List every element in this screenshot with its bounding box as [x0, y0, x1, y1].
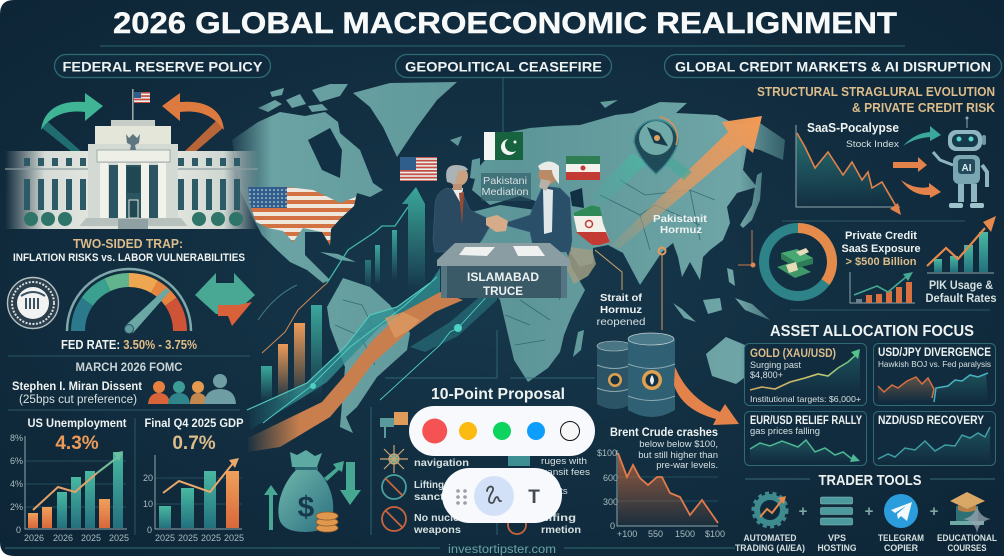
chart: us unemployment: 6% — [10, 456, 23, 466]
dissent text: (25bps cut preference) — [19, 394, 137, 406]
pik label — [926, 280, 996, 305]
brent heading: Brent Crude crashes — [610, 427, 718, 439]
private credit label: SaaS Exposure — [842, 243, 920, 255]
chart: us unemployment: 2025 — [81, 533, 101, 543]
panel: asset allocation — [744, 323, 996, 466]
flag: usa — [400, 157, 437, 181]
panel: trader tools — [735, 472, 997, 553]
proposal: no nuclear weapons — [413, 512, 469, 536]
heading pill: geopolitical ceasefire — [396, 54, 612, 78]
icon: navigation compass — [380, 445, 408, 473]
green curved arrow — [41, 93, 103, 152]
tool labels: TELEGRAM — [878, 533, 924, 543]
proposal: lifting sanctions — [414, 479, 445, 503]
chart: exposure bars — [850, 272, 915, 303]
card: gold: Surging past — [750, 360, 801, 370]
icon: money bag — [264, 450, 361, 532]
private credit label: > $500 Billion — [846, 256, 917, 268]
connector: credit — [738, 230, 752, 265]
plus: + — [865, 503, 874, 520]
credit subheading: STRUCTURAL STRAGLURAL EVOLUTION — [757, 85, 995, 99]
flag on federal reserve — [132, 89, 150, 121]
proposal: lifting sanctions: sanct — [414, 491, 445, 503]
chart: brent price: 550 — [648, 529, 663, 539]
pik label: Default Rates — [926, 293, 996, 305]
card: nzd/usd: NZD/USD RECOVERY — [878, 415, 984, 427]
rising bars on map — [258, 187, 425, 402]
proposal: lifting motion: rmetion — [541, 524, 581, 536]
tool labels: AUTOMATED — [744, 533, 797, 543]
map: north america — [232, 112, 383, 283]
big orange arrow to credit panel — [610, 116, 762, 248]
dissent text — [12, 379, 142, 406]
label: strait of hormuz: reopened — [596, 316, 646, 328]
chart: pik usage — [927, 216, 996, 273]
tool labels: TRADING (AI/EA) — [735, 543, 805, 553]
icon: automated trading gear — [753, 493, 787, 527]
chart: us unemployment: 0 — [16, 525, 21, 535]
location pin — [590, 117, 692, 206]
proposal: transit fees: ruges with — [541, 456, 587, 467]
chart: brent price: $100 — [705, 529, 725, 539]
card: usd/jpy — [874, 344, 996, 406]
chart: q4 gdp: 10 — [143, 499, 153, 509]
credit subheading — [757, 85, 995, 115]
tool labels — [735, 533, 997, 553]
card: eur/usd: EUR/USD RELIEF RALLY — [750, 415, 862, 427]
trees — [24, 212, 243, 226]
heading pill: federal reserve policy: FEDERAL RESERVE POLICY — [62, 58, 263, 74]
negotiating table — [437, 243, 570, 298]
value: gdp: 0.7% — [172, 433, 216, 454]
proposal: navigation: navigation — [414, 457, 469, 469]
handshake — [486, 215, 508, 232]
card: gold: GOLD (XAU/USD) — [750, 348, 836, 360]
label: pakistanit hormuz: Hormuz — [660, 224, 702, 236]
label: pakistanit hormuz — [653, 213, 708, 236]
dissent text: Stephen I. Miran Dissent — [12, 379, 142, 393]
icon: two-way arrows — [195, 273, 255, 326]
table label: ISLAMABAD — [467, 272, 539, 284]
chart: q4 gdp: 0 — [147, 525, 152, 535]
heading: gdp: Final Q4 2025 GDP — [144, 418, 244, 430]
credit subheading: & PRIVATE CREDIT RISK — [852, 101, 995, 115]
ribbons rising across map — [247, 268, 497, 452]
chart: us unemployment: 2026 — [24, 533, 44, 543]
brent note — [638, 439, 718, 471]
panel: global credit — [738, 85, 996, 310]
table label — [467, 272, 539, 298]
proposal: transit fees — [541, 456, 590, 478]
icon: no nuclear — [382, 507, 406, 531]
tool labels: COURSES — [948, 543, 986, 553]
orange down arrow — [674, 367, 739, 425]
proposal list — [380, 412, 590, 536]
chart: us unemployment — [10, 418, 129, 543]
map: arctic islands — [258, 84, 348, 112]
saas heading: SaaS-Pocalypse — [807, 121, 899, 135]
chart: q4 gdp: 2025 — [224, 533, 244, 543]
chart: q4 gdp: 2025 — [178, 533, 198, 543]
icon: fomc members — [148, 374, 236, 404]
toolbar: drawing tools: T — [528, 487, 540, 508]
chart: q4 gdp: 2025 — [155, 533, 175, 543]
card: nzd/usd — [874, 412, 996, 466]
label: pakistani mediation — [481, 173, 531, 201]
map: africa — [466, 205, 585, 382]
icon: money bag: $ — [298, 491, 315, 524]
map: cuba and caribbean — [320, 252, 356, 262]
ribbon: lower teal band — [410, 298, 497, 352]
table label: TRUCE — [483, 286, 523, 298]
orange curved arrow — [162, 93, 224, 152]
map: australia — [706, 337, 745, 384]
icon: flags — [380, 412, 408, 438]
private credit label — [842, 230, 920, 268]
map: eurasia — [472, 102, 785, 285]
coins — [316, 512, 338, 532]
card: gold — [744, 344, 866, 406]
up-right arrow — [324, 461, 344, 481]
world map — [232, 82, 785, 433]
card: eur/usd — [744, 412, 866, 466]
gauge: fed rate — [67, 269, 191, 334]
proposal: lifting motion: ets — [555, 486, 568, 497]
heading: 10-point proposal: 10-Point Proposal — [431, 386, 565, 403]
label: strait of hormuz: Hormuz — [600, 304, 642, 316]
chart: saas-pocalypse — [796, 121, 901, 215]
chart: brent price: +100 — [617, 529, 637, 539]
icon: education cap — [950, 492, 985, 525]
chart: q4 gdp: 2025 — [201, 533, 221, 543]
chart: brent price: 600 — [603, 473, 618, 483]
private credit label: Private Credit — [845, 230, 917, 242]
panel: brent crude — [597, 427, 725, 539]
plus: + — [930, 503, 939, 520]
label: strait of hormuz: Strait of — [600, 292, 643, 304]
proposal: transit fees: transit fees — [541, 467, 590, 478]
title: 2026 GLOBAL MACROECONOMIC REALIGNMENT — [113, 7, 897, 40]
down arrow — [340, 462, 361, 505]
chart: us unemployment: 8% — [10, 433, 23, 443]
trader tools heading: TRADER TOOLS — [818, 472, 922, 489]
arrows to robot — [893, 126, 941, 198]
march fomc heading: MARCH 2026 FOMC — [76, 360, 183, 374]
ribbon: orange band — [248, 292, 463, 452]
label: pakistani mediation: Mediation — [482, 186, 529, 198]
proposal: lifting motion: lifing — [545, 512, 576, 524]
iran map flag — [573, 205, 610, 245]
divider lines — [782, 221, 990, 310]
chart: brent price: 0 — [610, 521, 615, 531]
asset allocation heading: ASSET ALLOCATION FOCUS — [770, 323, 974, 340]
icon: oil barrels — [597, 333, 675, 417]
card: gold: Institutional targets: $6,000+ — [750, 394, 861, 404]
icon: no sanctions — [382, 475, 406, 499]
icon: ai robot — [933, 116, 987, 208]
chart: brent price — [597, 448, 725, 539]
map: tan arabia — [566, 247, 596, 284]
card: eur/usd: gas prices falling — [750, 426, 820, 436]
fed rate label: FED RATE: 3.50% - 3.75% — [61, 337, 197, 352]
value: unemployment: 4.3% — [55, 433, 99, 454]
stock index label: Stock Index — [846, 139, 899, 150]
tool labels: COPIER — [884, 543, 918, 553]
icon: motion badge — [508, 516, 526, 534]
chart: credit donut — [750, 228, 832, 296]
federal reserve building — [5, 120, 258, 229]
toolbar: drawing tools — [442, 468, 562, 523]
plus: + — [799, 503, 808, 520]
right negotiator — [505, 162, 572, 252]
map: madagascar — [573, 330, 584, 357]
proposal: no nuclear weapons: weapons — [413, 524, 461, 536]
brent note: below below $100, — [639, 439, 718, 450]
heading pill: federal reserve policy — [54, 54, 270, 78]
icon: federal reserve seal — [8, 278, 58, 328]
chart: brent price: 1500 — [675, 529, 695, 539]
chart: q4 gdp — [143, 418, 244, 543]
icon: transit fees — [508, 456, 530, 466]
heading pill: global credit markets: GLOBAL CREDIT MARKETS & AI DISRUPTION — [675, 58, 991, 74]
chart: us unemployment: 2026 — [53, 533, 73, 543]
map: south america — [327, 278, 410, 433]
ribbon: teal band — [247, 268, 440, 430]
tool labels: VPS — [828, 533, 846, 543]
two-sided trap heading: TWO-SIDED TRAP: — [73, 237, 183, 251]
proposal: lifting sanctions: Lifting — [414, 479, 444, 491]
chart: brent price: 300 — [603, 497, 618, 507]
map: greenland — [353, 82, 457, 157]
label: pakistani mediation: Pakistani — [483, 175, 527, 187]
icon: vps servers — [820, 497, 852, 525]
chart: us unemployment: 2025 — [109, 533, 129, 543]
card: gold: $4,800+ — [750, 370, 783, 380]
flag: pakistan — [484, 132, 523, 160]
left negotiator — [433, 165, 497, 252]
map: japan and islands — [450, 100, 770, 322]
panel: geopolitical ceasefire — [245, 117, 739, 536]
frame lines — [100, 46, 905, 535]
panel: federal reserve policy — [5, 89, 258, 543]
icon: ai robot: AI — [962, 163, 972, 174]
heading pill: global credit markets — [664, 54, 1002, 78]
two-sided trap subtitle: INFLATION RISKS vs. LABOR VULNERABILITIES — [13, 252, 245, 264]
marker line: hormuz — [595, 248, 666, 330]
card: usd/jpy: Hawkish BOJ vs. Fed paralysis — [878, 359, 991, 369]
icon: cash stacks — [777, 248, 813, 278]
heading pill: geopolitical ceasefire: GEOPOLITICAL CEASEFIRE — [405, 58, 602, 74]
brent note: but still higher than — [638, 450, 718, 461]
proposal: lifting motion — [541, 486, 581, 536]
up arrow — [264, 485, 278, 530]
flag: iran — [566, 156, 600, 180]
label: pakistanit hormuz: Pakistanit — [653, 213, 708, 225]
brent note: pre-war levels. — [656, 460, 718, 471]
heading: us unemployment: US Unemployment — [28, 418, 127, 430]
big flag-map: usa — [245, 185, 360, 250]
chart: us unemployment: 4% — [10, 479, 23, 489]
chart: q4 gdp: 20 — [143, 473, 153, 483]
tool labels: HOSTING — [818, 543, 856, 553]
icon: telegram — [884, 494, 918, 528]
footer: investortipster.com — [448, 544, 556, 556]
decorative sparkle watermark — [963, 505, 991, 533]
divider lines — [8, 356, 250, 535]
pik label: PIK Usage & — [929, 280, 993, 292]
proposal: no nuclear weapons: No nuclear — [414, 512, 469, 524]
chart: brent price: $100 — [597, 448, 617, 458]
card: usd/jpy: USD/JPY DIVERGENCE — [878, 347, 991, 359]
toolbar: colour picker — [409, 406, 595, 456]
map: hudson bay and inland detail — [308, 128, 584, 208]
label: strait of hormuz — [596, 292, 646, 328]
chart: us unemployment: 2% — [10, 502, 23, 512]
tool labels: EDUCATIONAL — [937, 533, 997, 543]
